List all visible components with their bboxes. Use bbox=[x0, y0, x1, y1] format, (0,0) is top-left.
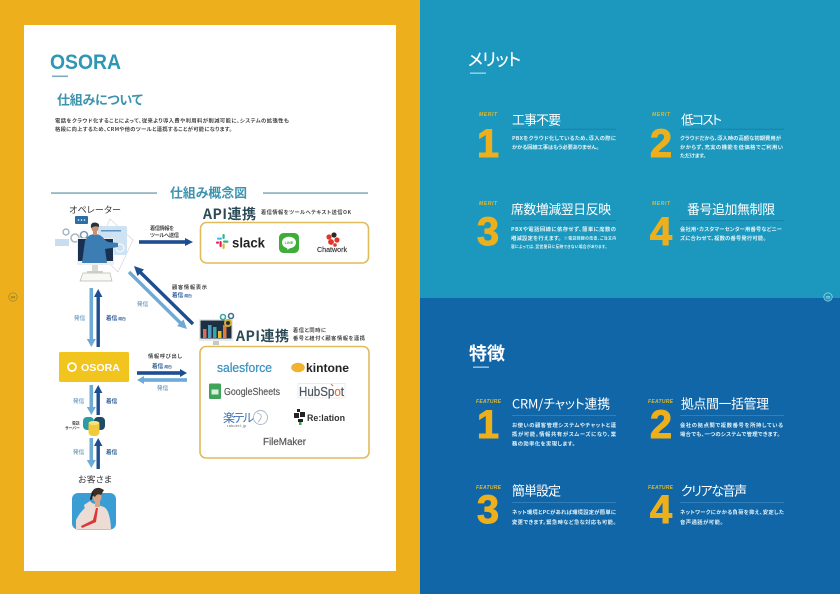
merit item 1 bbox=[477, 110, 616, 166]
logo: slack bbox=[216, 234, 265, 250]
text block: intro: 電話をクラウド化することによって、従来より導入費や利用料が削減可能に、システムの拡張性も bbox=[55, 116, 289, 124]
feature item 2 bbox=[648, 394, 784, 447]
merit item 2: かからず、充実の機能を低価格でご利用い bbox=[680, 143, 783, 151]
label: send to tool: ツールへ送信 bbox=[150, 231, 180, 239]
merit item 3: MERIT bbox=[479, 201, 498, 207]
panel: feature background bbox=[420, 298, 840, 594]
feature item 4: 4 bbox=[650, 488, 673, 532]
arrow: OSORA to server bbox=[87, 385, 96, 415]
label: information call: 着信（現在） bbox=[152, 362, 173, 370]
feature item 2: 場合でも、一つのシステムで管理できます。 bbox=[680, 430, 780, 438]
arrow: OSORA to CRM bbox=[137, 369, 187, 377]
label: information call bbox=[148, 352, 182, 392]
label: information call: 情報呼び出し bbox=[148, 352, 182, 360]
label: outgoing: 発信 bbox=[74, 314, 86, 322]
feature item 4 bbox=[648, 480, 784, 532]
page number 05 bbox=[824, 293, 832, 301]
logo: Chatwork: Chatwork bbox=[317, 245, 347, 254]
label: incoming: 着信（現在） bbox=[106, 314, 127, 322]
label: customer: お客さま bbox=[78, 472, 112, 486]
feature item 1: CRM/チャット連携 bbox=[512, 394, 610, 412]
feature item 3: 簡単設定 bbox=[512, 480, 561, 500]
text: lower API note bbox=[293, 326, 365, 342]
arrow: server to customer bbox=[87, 438, 96, 468]
feature item 4: ネットワークにかかる負荷を抑え、安定した bbox=[680, 508, 784, 516]
feature item 1: 1 bbox=[477, 403, 499, 447]
logo: Chatwork bbox=[317, 232, 347, 254]
logo: Rakutel: rakutel.jp bbox=[227, 424, 247, 428]
label: outgoing and incoming: 発信 bbox=[73, 397, 85, 405]
merit item 1: 工事不要 bbox=[512, 110, 561, 128]
label: phone server bbox=[65, 420, 80, 432]
panel: yellow left page background bbox=[0, 0, 420, 594]
label: outgoing and incoming lower: 発信 bbox=[73, 448, 85, 456]
logo: LINE: LINE bbox=[285, 241, 294, 245]
merit item 2: 2 bbox=[650, 122, 672, 166]
feature item 3: 3 bbox=[477, 488, 499, 532]
feature item 1: 務の効率化を実現します。 bbox=[512, 440, 575, 448]
arrow: operator outgoing down bbox=[87, 288, 96, 347]
logo box: OSORA bbox=[59, 352, 129, 382]
label: customer info: 顧客情報表示 bbox=[172, 283, 207, 291]
merit item 2 bbox=[650, 110, 784, 166]
label: outgoing diagonal: 発信 bbox=[137, 300, 149, 308]
label: outgoing and incoming lower bbox=[73, 448, 118, 456]
feature item 2: FEATURE bbox=[648, 399, 674, 405]
logo: Rakutel: 楽テル bbox=[223, 409, 254, 426]
label: operator: オペレーター bbox=[69, 203, 121, 216]
label: send to tool: 着信情報を bbox=[150, 224, 174, 232]
merit item 3: 3 bbox=[477, 210, 499, 254]
heading: API lower: API連携 bbox=[235, 326, 289, 346]
logo box: OSORA: OSORA bbox=[81, 362, 120, 374]
feature item 4: FEATURE bbox=[648, 485, 674, 491]
merit item 3: 席数増減翌日反映 bbox=[511, 199, 611, 218]
label: outgoing and incoming lower: 着信 bbox=[106, 448, 118, 456]
merit item 4: ズに合わせて、複数の番号発行可能。 bbox=[680, 234, 766, 242]
panel: CRM tools bbox=[200, 346, 369, 458]
feature item 3: ネット環境とPCがあれば環境設定が簡単に bbox=[512, 508, 616, 516]
title: OSORA: OSORA bbox=[50, 50, 121, 74]
heading: API upper: API連携 bbox=[202, 204, 256, 224]
logo: Google Sheets bbox=[209, 384, 280, 399]
text: lower API note: 番号と紐付く顧客情報を連携 bbox=[293, 334, 365, 342]
merit item 3: 容によっては、翌営業日に反映できない場合があります。 bbox=[511, 244, 607, 250]
merit item 1: かかる回線工事はもう必要ありません。 bbox=[512, 143, 599, 151]
feature item 3: 変更できます。緊急時など急な対応も可能。 bbox=[512, 518, 616, 526]
page number 05: 05 bbox=[826, 295, 831, 300]
label: customer info: 着信（現在） bbox=[172, 291, 193, 299]
feature item 1 bbox=[476, 394, 617, 448]
arrow: customer to server bbox=[94, 438, 102, 469]
text block: intro bbox=[55, 116, 289, 133]
feature item 3 bbox=[476, 480, 616, 532]
label: customer info bbox=[172, 283, 207, 299]
logo: Rakutel bbox=[223, 409, 268, 428]
merit item 3 bbox=[477, 199, 616, 254]
text: lower API note: 着信と同時に bbox=[293, 326, 326, 334]
merit item 1: MERIT bbox=[479, 112, 498, 118]
merit item 2: MERIT bbox=[652, 112, 671, 118]
merit item 2: ただけます。 bbox=[680, 151, 706, 159]
merit item 4: 会社用・カスタマーセンター用番号などニー bbox=[680, 225, 782, 233]
label: phone server: 電話 bbox=[72, 420, 80, 426]
merit item 1: 1 bbox=[477, 122, 499, 166]
merit item 3: ※電話回線の改善、ご注文内 bbox=[564, 236, 616, 242]
panel: chat tools bbox=[200, 222, 368, 263]
merit item 4 bbox=[650, 199, 784, 254]
feature item 4: 音声通話が可能。 bbox=[680, 518, 723, 526]
merit item 4: MERIT bbox=[652, 201, 671, 207]
heading: features: 特徴 bbox=[469, 340, 505, 366]
label: phone server: サーバー bbox=[65, 426, 80, 432]
merit item 4: 番号追加無制限 bbox=[687, 199, 775, 218]
page number 04 bbox=[9, 293, 17, 301]
heading: merit: メリット bbox=[468, 46, 521, 70]
feature item 1: FEATURE bbox=[476, 399, 502, 405]
logo: salesforce: salesforce bbox=[217, 360, 272, 375]
label: outgoing and incoming bbox=[73, 397, 118, 405]
feature item 4: クリアな音声 bbox=[681, 480, 747, 500]
arrow: outgoing to API bbox=[129, 272, 187, 329]
feature item 3: FEATURE bbox=[476, 485, 502, 491]
logo: FileMaker: FileMaker bbox=[263, 437, 307, 448]
feature item 2: 拠点間一括管理 bbox=[681, 394, 769, 412]
label: information call: 発信 bbox=[157, 384, 169, 392]
page number 04: 04 bbox=[11, 295, 16, 300]
logo: slack: slack bbox=[232, 234, 265, 250]
arrow: incoming up to operator bbox=[94, 289, 102, 347]
icon: dashboard monitor with gears bbox=[199, 314, 234, 345]
label: send to tool bbox=[150, 224, 180, 239]
arrow: server to OSORA bbox=[94, 385, 102, 415]
icon: customer on phone bbox=[72, 488, 116, 530]
feature item 1: お使いの顧客管理システムやチャットと連 bbox=[512, 421, 617, 429]
logo: HubSpot: HubSpot bbox=[299, 384, 344, 399]
icon: operator at computer bbox=[55, 216, 133, 281]
arrow: operator to chat tools bbox=[139, 238, 193, 246]
merit item 2: 低コスト bbox=[681, 110, 722, 128]
feature item 1: 携が可能。情報共有がスムーズになり、業 bbox=[512, 430, 617, 438]
text: upper API note: 着信情報をツールへテキスト送信OK bbox=[261, 208, 351, 216]
logo: Re:lation bbox=[294, 409, 345, 425]
arrow: customer info to operator bbox=[134, 266, 193, 324]
merit item 3: 増減設定を行えます。 bbox=[511, 234, 561, 242]
merit item 3: PBXや電話回線に依存せず、簡単に席数の bbox=[511, 225, 616, 233]
icon: phone server bbox=[83, 417, 105, 436]
panel: white card bbox=[24, 25, 396, 571]
panel: merit background bbox=[420, 0, 840, 298]
feature item 2: 会社の拠点間で複数番号を所持している bbox=[680, 421, 783, 429]
logo: LINE bbox=[279, 233, 299, 253]
heading: how it works: 仕組みについて bbox=[57, 90, 143, 108]
merit item 1: PBXをクラウド化しているため、導入の際に bbox=[512, 134, 616, 142]
label: outgoing and incoming: 着信 bbox=[106, 397, 118, 405]
logo: Re:lation: Re:lation bbox=[307, 413, 345, 424]
text block: intro: 格段に向上するため、CRMや他のツールと連携することが可能になります。 bbox=[55, 125, 232, 133]
logo: kintone: kintone bbox=[306, 361, 349, 375]
logo: Google Sheets: GoogleSheets bbox=[224, 387, 280, 398]
merit item 2: クラウドだから、導入時の高額な初期費用が bbox=[680, 134, 782, 142]
heading: OSORA block bbox=[50, 50, 121, 77]
feature item 2: 2 bbox=[650, 403, 672, 447]
arrow: CRM to OSORA bbox=[137, 376, 187, 384]
heading: concept diagram: 仕組み概念図 bbox=[170, 182, 247, 202]
merit item 4: 4 bbox=[650, 210, 673, 254]
title underline bbox=[52, 76, 68, 77]
